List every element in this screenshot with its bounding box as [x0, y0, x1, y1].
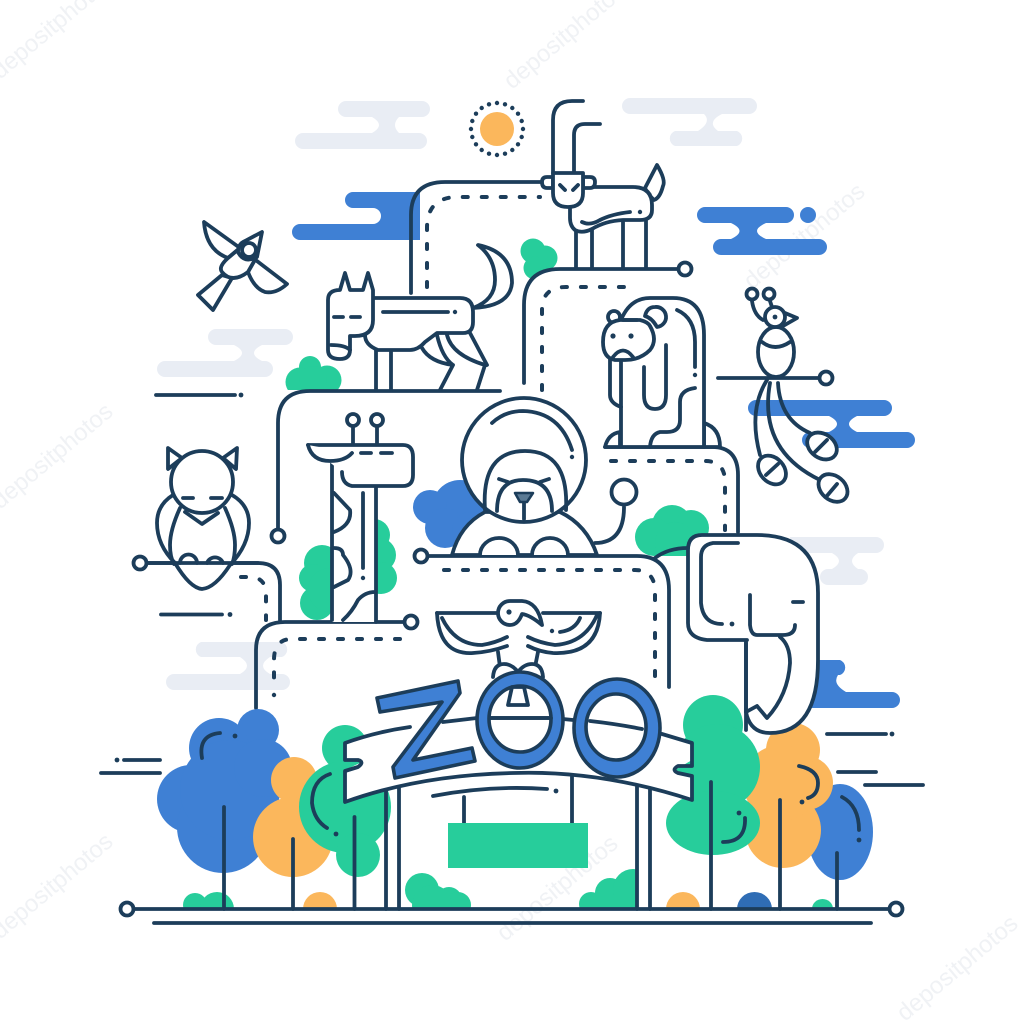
elephant [655, 535, 818, 733]
mountain path: top [411, 182, 545, 293]
cloud: blue top left [292, 192, 420, 240]
tree: orange left [253, 757, 333, 909]
tree: orange right [743, 723, 833, 909]
watermark text: depositphotos [492, 830, 623, 947]
cloud: blue mid right [748, 400, 915, 448]
bush: green behind giraffe left [299, 545, 330, 620]
ibex [542, 101, 664, 268]
cloud: grey top right [622, 98, 757, 146]
watermark text: depositphotos [892, 910, 1023, 1024]
bird [198, 222, 287, 310]
cloud: blue top right [697, 207, 827, 255]
bear [603, 298, 720, 447]
wolf [328, 245, 512, 390]
tree: green right [666, 695, 760, 909]
cloud: blue behind elephant [800, 660, 900, 708]
giraffe [308, 414, 413, 622]
letter O [477, 672, 563, 768]
bottom bushes [183, 873, 833, 908]
hanging sign [448, 777, 588, 868]
mountain path: bear ledge [605, 447, 738, 532]
mountain path: owl ledge [134, 556, 280, 620]
mountain path: lion ledge [414, 550, 669, 687]
cloud: grey behind elephant [790, 537, 884, 585]
watermark text: depositphotos [739, 178, 870, 295]
lion [452, 398, 636, 555]
mountain fill masks [524, 268, 676, 383]
tree: blue right [807, 784, 873, 909]
banner [345, 716, 692, 802]
ground line [120, 902, 902, 923]
cloud: grey lower left [166, 642, 290, 690]
mountain path: giraffe ledge [256, 616, 418, 708]
letter O [574, 679, 660, 777]
peacock [718, 288, 853, 507]
speed line dots [115, 393, 894, 762]
eagle [437, 601, 600, 677]
bush: green by right pillar [579, 869, 636, 908]
short speed lines [101, 395, 923, 785]
bush: green near ibex [520, 238, 558, 280]
cloud: grey top left [295, 101, 430, 149]
letter Z [377, 681, 475, 778]
sun [469, 101, 525, 157]
owl [147, 448, 258, 589]
gate pillars [386, 785, 650, 909]
cloud: grey mid left [157, 329, 293, 377]
bush: blue behind lion [413, 480, 488, 548]
mountain path: wolf ledge [272, 391, 500, 542]
bush: green behind giraffe right [378, 520, 397, 594]
bush: green right of lion [635, 505, 709, 556]
bush: green near wolf [286, 356, 342, 390]
tree: green left [299, 725, 391, 909]
mountain path: second tier [524, 262, 692, 390]
tree: blue left [157, 709, 292, 909]
